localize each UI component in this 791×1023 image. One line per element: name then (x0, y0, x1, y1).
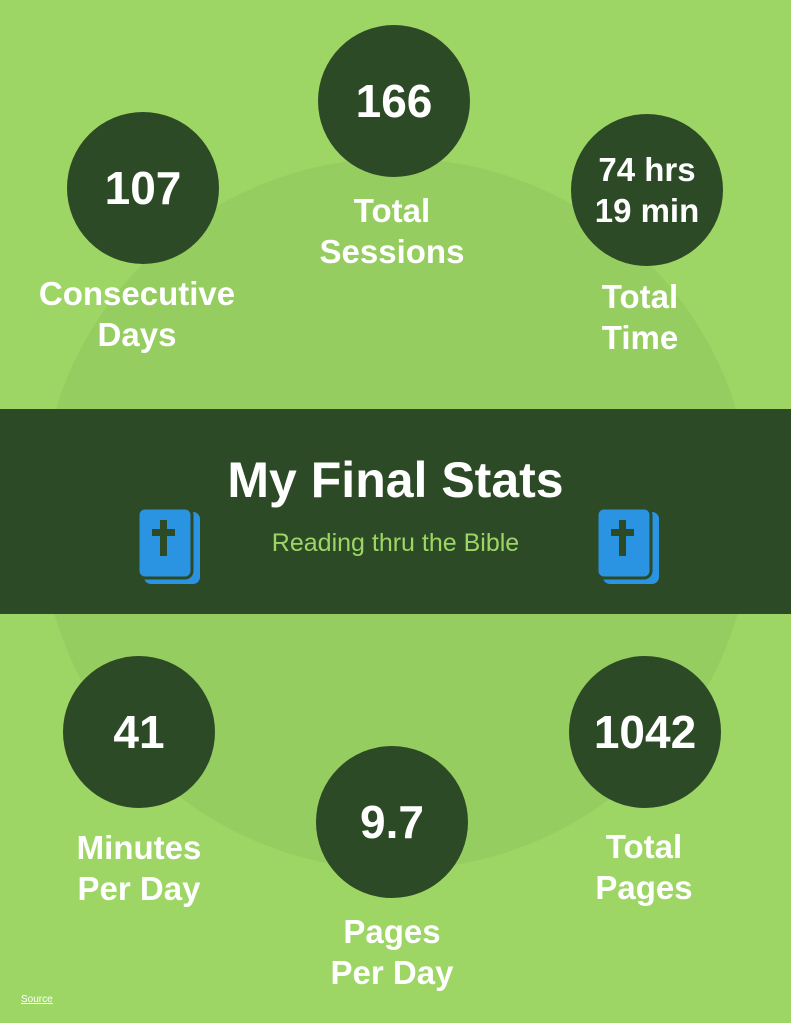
icon: bible right (598, 510, 659, 584)
subtitle: Reading thru the Bible (272, 529, 519, 557)
label: consecutive days: Consecutive (39, 275, 235, 312)
label: consecutive days (39, 275, 235, 353)
label: total sessions (320, 192, 464, 270)
label: total sessions: Total (354, 192, 430, 229)
stat: total pages: 1042 (594, 706, 696, 758)
stat: total time (571, 114, 723, 266)
label: total time (602, 278, 678, 356)
label: total time: Total (602, 278, 678, 315)
label: pages per day (331, 913, 454, 991)
stat: pages per day: 9.7 (360, 796, 424, 848)
stat: consecutive days (67, 112, 219, 264)
source link: Source (21, 994, 53, 1005)
stat: total time: 74 hrs (598, 151, 696, 188)
title band (0, 409, 791, 614)
stat: total time: 19 min (595, 192, 699, 229)
label: total time: Time (602, 319, 678, 356)
label: pages per day: Per Day (331, 954, 453, 991)
label: total sessions: Sessions (320, 233, 464, 270)
stat: total sessions (318, 25, 470, 177)
label: minutes per day: Per Day (78, 870, 200, 907)
label: total pages: Total (606, 828, 682, 865)
label: consecutive days: Days (98, 316, 176, 353)
label: minutes per day: Minutes (77, 829, 201, 866)
title: My Final Stats (227, 452, 564, 508)
stat: consecutive days: 107 (105, 162, 181, 214)
label: pages per day: Pages (343, 913, 441, 950)
stat: total pages (569, 656, 721, 808)
stat: minutes per day: 41 (113, 706, 165, 758)
label: minutes per day (77, 829, 201, 907)
label: total pages: Pages (595, 869, 693, 906)
stat: total sessions: 166 (356, 75, 432, 127)
stat: pages per day (316, 746, 468, 898)
label: total pages (595, 828, 693, 906)
stat: minutes per day (63, 656, 215, 808)
icon: bible left (140, 510, 200, 584)
